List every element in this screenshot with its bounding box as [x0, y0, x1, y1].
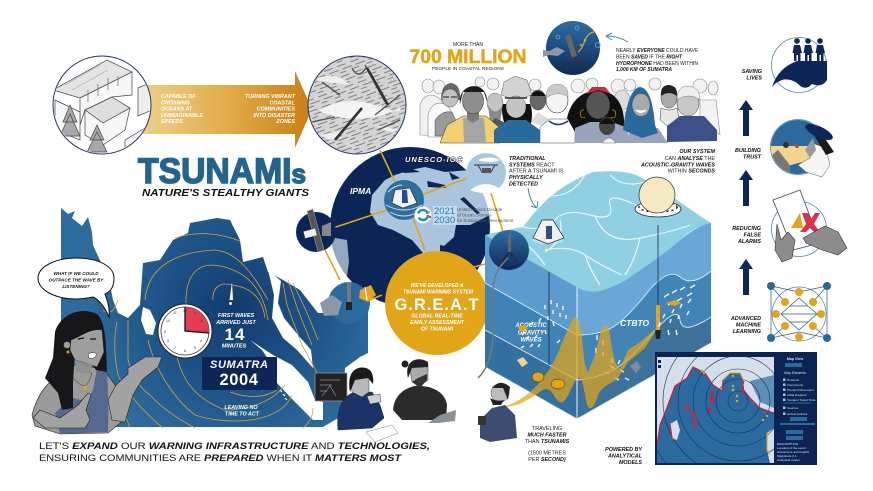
label: UNESCO-IOC: UNESCO-IOC: [405, 155, 463, 164]
clock: 3: [204, 330, 206, 334]
bottom call to action: ENSURING COMMUNITIES ARE PREPARED WHEN IT MATTERS MOST: [39, 453, 402, 464]
clock: 10: [166, 319, 170, 323]
text: leaving no time to act: TIME TO ACT: [225, 412, 260, 418]
clock: [158, 304, 212, 358]
text: leaving no time to act: LEAVING NO: [224, 405, 258, 411]
title: TSUNAMIs: [138, 152, 306, 191]
exclamation mark: [229, 282, 233, 305]
text: traditional systems react: AFTER A TSUNAMI IS: [509, 168, 564, 174]
text: travelling much faster: MUCH FASTER: [528, 432, 567, 438]
dashboard sidebar: Arrival time and heights: [777, 450, 810, 454]
text: our system can analyse: SECONDS: [688, 168, 715, 174]
dashboard sidebar: Tsunami Travel Time: [787, 398, 816, 402]
dashboard sidebar: [777, 357, 816, 462]
text: powered by analytical models: MODELS: [619, 460, 642, 466]
dress: [55, 368, 108, 434]
tether lines: [549, 225, 658, 365]
text: our system can analyse: WITHIN: [668, 168, 688, 174]
step: building trust: TRUST: [743, 154, 762, 160]
label: Sumatra 2004: 2004: [219, 371, 259, 389]
text: travelling much faster: (1500 METRES: [528, 450, 566, 456]
node: drone: [466, 153, 506, 193]
step: saving lives: [742, 38, 827, 92]
label: Sumatra 2004: SUMATRA: [210, 359, 268, 371]
text: travelling much faster: TRAVELING: [532, 426, 562, 432]
text: nearly everyone could have been saved: 1,000 KM OF SUMATRA: [616, 67, 672, 73]
necklace: [73, 372, 92, 386]
body: [32, 365, 124, 434]
Decade of Ocean Science logo: for Sustainable Development: [457, 218, 514, 223]
Decade of Ocean Science logo: [414, 206, 514, 226]
clock: 12: [183, 309, 187, 313]
Decade of Ocean Science logo: 2021: [434, 206, 455, 217]
map: Indian Ocean wave propagation: [61, 208, 368, 428]
speech bubble: OUTPACE THE WAVE BY: [49, 278, 104, 282]
dashboard sidebar: Map View: [787, 357, 803, 361]
speech bubble: WHAT IF WE COULD: [53, 271, 99, 276]
callout: G.R.E.A.T warning system: EARLY ASSESSMENT: [410, 320, 465, 326]
gravity wave dashes: [521, 285, 695, 380]
text: more than 700 million: PEOPLE IN COASTAL REGIONS: [432, 66, 504, 72]
illustration: globe with network nodes: [296, 147, 514, 324]
clock: 8: [167, 339, 169, 343]
dashboard sidebar: Instruments: [787, 383, 804, 387]
text: traditional systems react: TRADITIONAL: [509, 156, 546, 162]
node: satellite: [296, 209, 336, 252]
step: advanced machine learning: LEARNING: [733, 329, 762, 335]
step: reducing false alarms: FALSE: [744, 232, 761, 238]
speech bubble: LISTENING?: [62, 284, 90, 289]
clock: 9: [164, 330, 166, 334]
text: our system can analyse: CAN: [665, 156, 677, 162]
text: travelling much faster: SECOND): [541, 457, 566, 463]
arrow up: [739, 259, 753, 295]
text: traditional systems react: DETECTED: [509, 182, 538, 188]
text: our system can analyse: ANALYSE THE: [677, 156, 715, 162]
scientist at laptop, bottom: [478, 383, 517, 442]
text: powered by analytical models: POWERED BY: [605, 447, 642, 453]
arrow up: [739, 100, 753, 136]
callout: G.R.E.A.T warning system: GLOBAL REAL-TIME: [411, 314, 463, 320]
text: more than 700 million: 700 MILLION: [410, 46, 526, 68]
speech bubble: [38, 258, 114, 317]
text: nearly everyone could have been saved: SAVED IF THE RIGHT: [631, 54, 682, 60]
text: nearly everyone could have been saved: HYDROPHONE: [616, 61, 653, 67]
dashboard sidebar: Initial Regions: [787, 393, 807, 397]
text: turning vibrant coastal communities: TURNING VIBRANT: [245, 94, 296, 100]
hair: [45, 311, 107, 410]
arrow up: [739, 170, 753, 206]
water surface: [485, 171, 711, 292]
callout: G.R.E.A.T warning system: G.R.E.A.T: [394, 296, 480, 314]
Decade of Ocean Science logo: of Ocean Science: [457, 212, 492, 218]
text: first waves arrived just 14 minutes: FIRST WAVES: [218, 313, 254, 319]
clock: 7: [174, 346, 176, 350]
text: traditional systems react: REACT: [535, 162, 555, 168]
arrow: from crossing oceans to disaster zones: [143, 71, 312, 148]
left face: [485, 235, 577, 419]
text: capable of crossing oceans: CROSSING: [161, 100, 191, 106]
node: hydrophone icon: [543, 21, 600, 75]
text: turning vibrant coastal communities: ZONES: [275, 119, 295, 125]
dashboard sidebar: Sources: [787, 406, 799, 410]
man in yellow shirt: [440, 86, 500, 143]
man with scarf: [660, 85, 680, 128]
arrow: traditional systems: [528, 188, 538, 208]
face: [70, 330, 104, 367]
clock: 6: [184, 349, 186, 353]
DART buoy: [532, 220, 564, 244]
sphere buoy: [635, 177, 681, 217]
callout: G.R.E.A.T warning system: OF TSUNAMI: [421, 326, 454, 332]
man in white shirt: [540, 84, 575, 143]
illustration: debris after tsunami: [308, 56, 406, 154]
dashboard sidebar: Arrival Isolines: [787, 412, 808, 416]
waveform: [503, 318, 654, 408]
callout: G.R.E.A.T warning system: [385, 251, 489, 355]
dark man: [530, 90, 550, 128]
Sumatra: [250, 340, 323, 420]
islands: [280, 390, 287, 400]
clock: 1: [194, 311, 196, 315]
text: our system can analyse: ACOUSTIC-GRAVITY WAVES: [640, 162, 715, 168]
dashboard sidebar: Location of the event: [777, 446, 806, 450]
dashboard sidebar: Analytical model: [777, 458, 800, 462]
step: advanced machine learning: MACHINE: [736, 322, 761, 328]
step: building trust: [735, 120, 835, 178]
hydrophone on cube: [478, 230, 529, 378]
label: Sumatra 2004: [202, 357, 277, 390]
pointing hand: [33, 393, 91, 428]
illustration: coastal town before tsunami: [53, 56, 152, 155]
text: capable of crossing oceans: OCEANS AT: [161, 106, 193, 112]
connector lines: [325, 150, 503, 300]
step: building trust: BUILDING: [735, 148, 762, 154]
text: traditional systems react: SYSTEMS: [509, 162, 535, 168]
node: hydrophone and fish: [320, 282, 376, 324]
bearded man: [485, 93, 510, 135]
text: first waves arrived just 14 minutes: ARRIVED JUST: [215, 320, 256, 326]
Sri Lanka: [141, 307, 156, 335]
elderly man: [667, 86, 717, 142]
node: buoy center: [384, 180, 424, 220]
step: advanced machine learning: [730, 282, 831, 342]
bottom call to action: [39, 441, 430, 464]
text: turning vibrant coastal communities: COMMUNITIES: [257, 106, 295, 112]
text: powered by analytical models: ANALYTICAL: [607, 454, 642, 460]
dashboard map screenshot: [655, 352, 817, 465]
text: first waves arrived just 14 minutes: 14: [225, 325, 245, 344]
step: saving lives: SAVING: [742, 69, 763, 75]
text: capable of crossing oceans: UNIMAGINABLE: [161, 113, 203, 119]
Decade of Ocean Science logo: 2030: [434, 215, 455, 226]
illustration: crowd of coastal people: [420, 76, 720, 143]
text: first waves arrived just 14 minutes: [215, 313, 256, 350]
dashboard sidebar: DESCRIPTION: [777, 442, 798, 446]
labels: ACOUSTIC: [514, 323, 547, 329]
seafloor sensors: [532, 372, 565, 389]
text: our system can analyse: OUR SYSTEM: [679, 149, 715, 155]
illustration: ocean cube: [478, 171, 711, 419]
Decade of Ocean Science logo: United Nations Decade: [457, 207, 503, 212]
text: travelling much faster: THAN: [525, 439, 541, 445]
text: travelling much faster: PER: [528, 457, 541, 463]
illustration: scientist with laptop: [393, 359, 456, 423]
woman with glasses: [435, 83, 460, 136]
arrow: hydrophone callout: [606, 33, 628, 42]
text: capable of crossing oceans: CAPABLE OF: [161, 94, 196, 100]
step: reducing false alarms: REDUCING: [732, 226, 762, 232]
contour lines: [103, 234, 320, 428]
illustration: scientist with blackboard: [315, 368, 398, 442]
text: first waves arrived just 14 minutes: MINUTES: [222, 344, 247, 350]
dashboard sidebar: Tsunami Movement: [787, 388, 814, 392]
step: advanced machine learning: ADVANCED: [730, 316, 761, 322]
bottom call to action: LET'S EXPAND OUR WARNING INFRASTRUCTURE AND TECHNOLOGIES,: [39, 441, 430, 452]
callout: G.R.E.A.T warning system: WE'VE DEVELOPED A: [411, 283, 464, 289]
mother and child: [567, 87, 628, 143]
open hand: [108, 357, 162, 422]
dashboard sidebar: Hotspots: [787, 378, 800, 382]
dashboard sidebar: Magnitude 9.1: [777, 454, 797, 458]
step: reducing false alarms: [732, 190, 847, 262]
step: saving lives: LIVES: [746, 76, 762, 82]
text: traditional systems react: PHYSICALLY: [509, 175, 543, 181]
text: nearly everyone could have been saved: BEEN: [616, 54, 631, 60]
clock: 11: [173, 311, 177, 315]
clock: 5: [194, 346, 196, 350]
text: nearly everyone could have been saved: NEARLY: [616, 48, 637, 54]
moored sensor: [655, 305, 661, 339]
background crowd: [420, 77, 720, 137]
clock: 4: [200, 339, 202, 343]
text: travelling much faster: TSUNAMIS: [541, 439, 570, 445]
right face: [577, 223, 711, 419]
fish: [517, 300, 681, 373]
text: more than 700 million: MORE THAN: [453, 42, 483, 48]
clock: 2: [201, 319, 203, 323]
labels: WAVES: [520, 338, 542, 344]
woman with feather headdress: [494, 76, 540, 143]
text: capable of crossing oceans: SPEEDS: [161, 119, 183, 125]
illustration: ocean cube: CTBTO: [620, 318, 650, 328]
text: turning vibrant coastal communities: INTO DISASTER: [253, 113, 295, 119]
woman in hijab: [623, 87, 668, 143]
Malay peninsula: [268, 270, 313, 368]
labels: GRAVITY: [518, 330, 545, 336]
step: reducing false alarms: ALARMS: [737, 239, 761, 245]
text: nearly everyone could have been saved: EVERYONE COULD HAVE: [637, 48, 698, 54]
subtitle: NATURE'S STEALTHY GIANTS: [142, 188, 309, 199]
dashboard sidebar: Map Elements: [784, 371, 806, 375]
text: nearly everyone could have been saved: HAD BEEN WITHIN: [652, 61, 698, 67]
text: turning vibrant coastal communities: COASTAL: [269, 100, 295, 106]
callout: G.R.E.A.T warning system: TSUNAMI WARNING SYSTEM: [403, 290, 474, 296]
label: IPMA: IPMA: [350, 186, 371, 196]
illustration: presenter woman: [32, 311, 162, 434]
